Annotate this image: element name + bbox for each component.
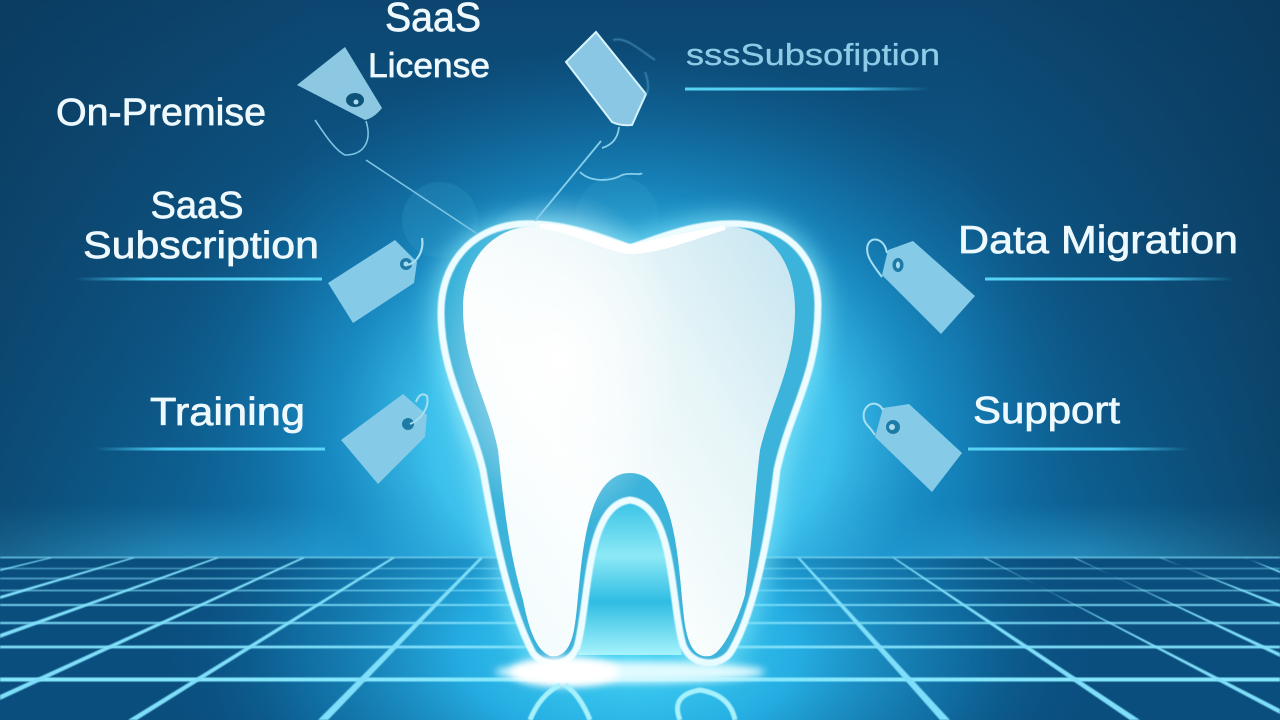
heading: SaaS License (368, 0, 490, 85)
tooth body (463, 227, 795, 656)
icon: price tag, Data Migration (867, 240, 975, 334)
tooth halo (441, 224, 818, 664)
label: Training (95, 391, 325, 450)
valley highlight (540, 226, 725, 252)
label: Data Migration (958, 219, 1238, 280)
label: Data Migration: Data Migration (958, 219, 1238, 262)
icon: price tag, SaaS Subscription (328, 238, 422, 323)
label: SaaS Subscription: SaaS (150, 185, 244, 227)
icon: price tag, Support (864, 404, 962, 492)
label: Support: Support (973, 390, 1120, 432)
heading: SaaS License: License (368, 47, 490, 85)
tooth base glow (495, 657, 765, 720)
perspective floor grid (0, 557, 1280, 720)
tooth highlight (440, 190, 680, 530)
inner arch between roots (578, 503, 682, 655)
label: Training: Training (150, 391, 305, 434)
tooth cyan gap (441, 224, 818, 664)
icon: price tag, Training (341, 394, 428, 484)
label: blurred SaaS Subscription (685, 37, 940, 90)
icon: price tag, On-Premise (297, 47, 476, 233)
tooth outline (441, 224, 818, 664)
icon: price tag, top centre (535, 32, 655, 221)
label: blurred SaaS Subscription: sssSubsofiption (686, 37, 940, 72)
tooth (440, 190, 818, 720)
label: SaaS Subscription (75, 185, 322, 280)
label: On-Premise: On-Premise (56, 92, 266, 134)
label: Support (968, 390, 1190, 450)
label: SaaS Subscription: Subscription (83, 225, 319, 267)
